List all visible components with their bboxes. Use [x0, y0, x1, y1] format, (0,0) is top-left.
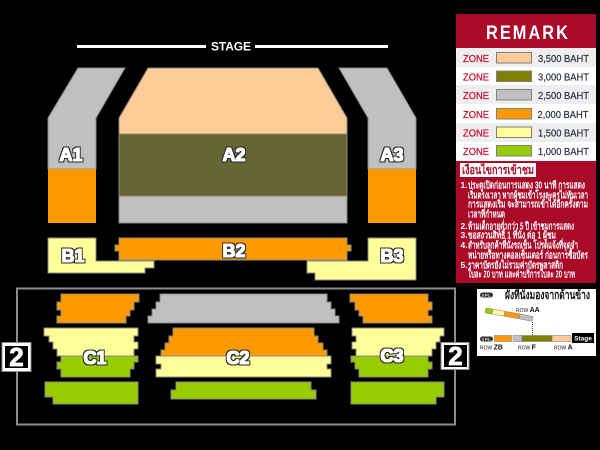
section C3: C3	[380, 346, 404, 366]
conditions list: 3.	[460, 230, 468, 240]
legend row 3,500	[463, 52, 590, 65]
floor 2 badge right: 2	[448, 341, 463, 371]
legend row 2,500: 2,500 BAHT	[538, 90, 590, 102]
legend row 3,000	[463, 71, 590, 84]
section B2: B2	[222, 241, 246, 261]
conditions list: 5.	[460, 260, 468, 270]
section A3: A3	[380, 145, 404, 165]
legend row 2,000	[463, 108, 589, 121]
conditions list: ขอสงวนสิทธิ์ 1 ที่นั่ง ต่อ 1 ผู้ชม	[468, 228, 556, 242]
tilted balcony bar	[485, 308, 533, 321]
section B3	[307, 238, 416, 280]
section B1: B1	[61, 246, 85, 266]
panel: side view diagram	[477, 286, 596, 356]
legend row 1,500	[463, 127, 590, 140]
section C3	[350, 294, 444, 404]
legend row 1,500: 1,500 BAHT	[538, 128, 590, 140]
legend row 2,000: ZONE	[463, 109, 489, 121]
section C2: C2	[226, 348, 250, 368]
section B1	[48, 238, 154, 273]
section C1	[44, 294, 139, 404]
legend row 1,500: ZONE	[463, 128, 489, 140]
stage heading: STAGE	[211, 40, 251, 54]
stage box: Stage	[574, 336, 592, 342]
section C2	[148, 294, 339, 399]
section A3	[339, 68, 416, 223]
row ZB label: ROW ZB	[480, 344, 503, 352]
row A label: ROW A	[554, 344, 573, 352]
remark header: REMARK	[486, 22, 568, 43]
legend row 3,000: 3,000 BAHT	[538, 72, 590, 84]
conditions list: 4.	[460, 240, 468, 250]
legend row 3,000: ZONE	[463, 72, 489, 84]
conditions list	[460, 180, 588, 280]
floor 2 badge right	[441, 341, 469, 371]
floor 2 badge left	[2, 342, 31, 372]
legend row 2,500: ZONE	[463, 90, 489, 102]
remark header	[456, 14, 596, 48]
floor 2 badge left: 2	[9, 342, 24, 372]
section A1: A1	[59, 145, 83, 165]
legend row 3,500: 3,500 BAHT	[538, 53, 590, 65]
legend row 3,500: ZONE	[463, 53, 489, 65]
conditions list: 2.	[460, 221, 468, 231]
section C1: C1	[83, 348, 107, 368]
panel: conditions	[456, 161, 596, 283]
panel: remark legend	[456, 14, 596, 161]
legend row 1,000: ZONE	[463, 146, 489, 158]
section B3: B3	[380, 246, 404, 266]
2nd floor pill: 2 FL.	[482, 293, 491, 298]
legend row 2,000: 2,000 BAHT	[538, 109, 589, 121]
section A1	[48, 68, 125, 223]
section A2: A2	[222, 145, 246, 165]
conditions list: 1.	[460, 180, 468, 190]
legend row 1,000: 1,000 BAHT	[538, 146, 590, 158]
ground floor bar	[494, 336, 571, 342]
stage heading	[77, 40, 388, 54]
second floor frame	[17, 288, 455, 424]
conditions list: เวลาที่กำหนด	[468, 206, 505, 220]
1st floor pill: 1 FL.	[482, 337, 491, 342]
conditions heading: เงื่อนไขการเข้าชม	[462, 161, 534, 177]
section B2	[115, 238, 351, 261]
row F label: ROW F	[518, 344, 537, 352]
legend row 1,000	[463, 146, 590, 158]
section A2	[119, 68, 347, 223]
sight line	[532, 322, 534, 335]
row AA label: ROW AA	[516, 307, 540, 314]
legend row 2,500	[463, 90, 590, 102]
